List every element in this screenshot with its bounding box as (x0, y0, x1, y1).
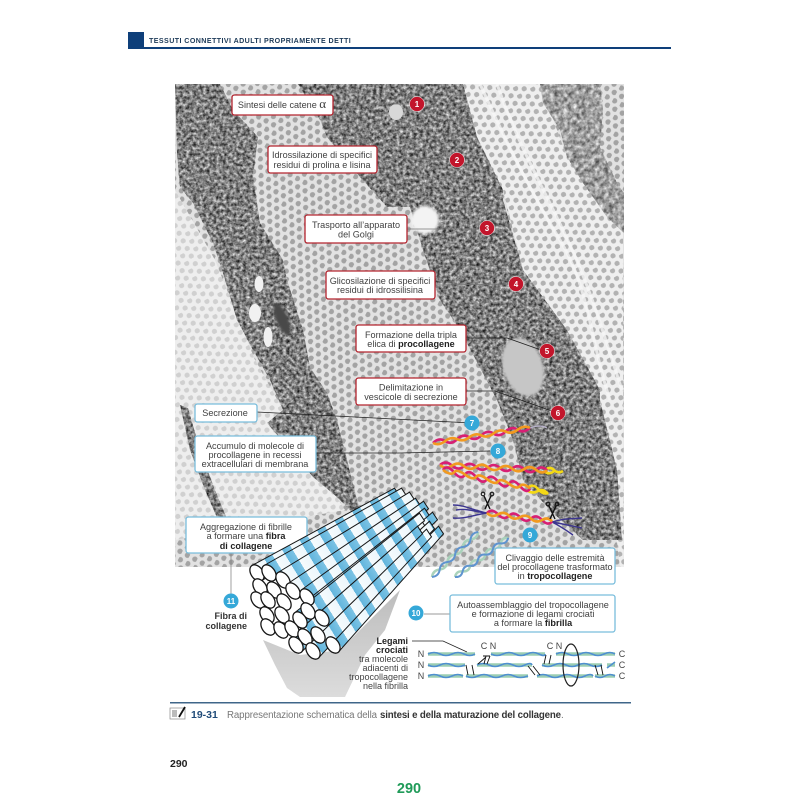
callout: aggregazione: a formare una fibra (207, 531, 286, 541)
page number green: 290 (397, 781, 421, 797)
cell: main fibroblast (298, 84, 622, 540)
end labels N: C (547, 641, 554, 651)
callout: trasporto (305, 215, 407, 243)
callout: vescicole: vescicole di secrezione (364, 392, 458, 402)
end labels N: C (619, 649, 626, 659)
callout: idrossilazione: residui di prolina e lisina (273, 160, 371, 170)
callout: vescicole (356, 378, 466, 405)
label: fibra di collagene: collagene (205, 621, 247, 631)
badge 6 (550, 406, 566, 420)
fibril end caps (247, 562, 343, 662)
caption rule (170, 702, 631, 704)
callout: autoassemblaggio: Autoassemblaggio del tropocollagene (457, 600, 609, 610)
row 2 (428, 662, 615, 668)
label: legami crociati: tropocollagene (349, 672, 408, 682)
caption: sintesi e della maturazione del collagene (380, 710, 562, 721)
badge 2 (450, 152, 464, 168)
badge 5 (540, 344, 554, 358)
badge 7 (464, 416, 480, 430)
callout: glicosilazione: Glicosilazione di specifici (330, 276, 430, 286)
label: legami crociati: crociati (376, 645, 408, 655)
badge 9 (522, 528, 538, 542)
callout: sintesi catene alfa: Sintesi delle catene α (238, 96, 326, 111)
callout: idrossilazione: Idrossilazione di specifici (272, 150, 372, 160)
callout: autoassemblaggio: e formazione di legami crociati (472, 609, 594, 619)
end labels N: N (418, 671, 424, 681)
badge 5: 5 (545, 347, 550, 356)
cell: left fibroblast (175, 84, 365, 525)
callout: autoassemblaggio: a formare la fibrilla (494, 618, 573, 628)
procollagen helix 3 (443, 467, 548, 494)
callout: accumulo (195, 436, 316, 472)
label: legami crociati: nella fibrilla (363, 681, 408, 691)
badge 11: 11 (227, 597, 236, 606)
badge 2: 2 (455, 156, 460, 165)
callout: aggregazione: di collagene (220, 541, 272, 551)
badge 6: 6 (556, 409, 561, 418)
callout: trasporto: del Golgi (338, 230, 374, 240)
badge 8: 8 (496, 447, 501, 456)
callout: clivaggio: del procollagene trasformato (497, 562, 613, 572)
badge 3 (480, 220, 494, 236)
caption: 19-31 (191, 709, 218, 721)
crosslinks (466, 655, 603, 675)
caption (191, 709, 564, 721)
callout: tripla elica: elica di procollagene (367, 339, 455, 349)
callout: aggregazione (186, 517, 307, 553)
vesicles (411, 206, 439, 234)
badge 1 (410, 96, 424, 112)
callout: secrezione (195, 404, 257, 422)
callout: vescicole: Delimitazione in (379, 382, 443, 392)
label: legami crociati: adiacenti di (362, 663, 408, 673)
label: fibra di collagene: Fibra di (214, 611, 247, 621)
end labels N: N (418, 649, 424, 659)
legami pointer line (412, 641, 467, 652)
callout: tripla elica: Formazione della tripla (365, 330, 458, 340)
callout: glicosilazione: residui di idrossilisina (337, 285, 424, 295)
label: legami crociati (349, 636, 408, 691)
row 3 (428, 674, 615, 678)
end labels N: C (481, 641, 488, 651)
callout: glicosilazione (326, 271, 435, 299)
tropocollagen left (432, 532, 478, 577)
end labels N: N (556, 641, 562, 651)
pale collagen field left (175, 190, 345, 540)
badge 11 (224, 594, 238, 608)
highlight ellipse (563, 644, 579, 686)
badge 1: 1 (415, 100, 420, 109)
row 1 (428, 652, 615, 656)
caption: Rappresentazione schematica della (227, 710, 378, 721)
procollagen helix with cleaved ends (453, 505, 582, 535)
numbered badges (224, 96, 566, 620)
callout: clivaggio: Clivaggio delle estremità (505, 553, 605, 563)
cell: thin process (180, 405, 226, 516)
page header (128, 32, 671, 49)
leader lines (231, 104, 552, 614)
badge 4 (508, 276, 524, 292)
badge 4: 4 (514, 280, 519, 289)
procollagen helix 2 (440, 463, 563, 473)
callout: secrezione: Secrezione (202, 408, 248, 418)
callout: clivaggio: in tropocollagene (518, 571, 592, 581)
folio: 290 (170, 758, 188, 770)
callout: accumulo: procollagene in recessi (208, 450, 302, 460)
fibril diagram (418, 641, 626, 686)
callout: aggregazione: Aggregazione di fibrille (200, 522, 292, 532)
pale fibres field right (463, 84, 624, 567)
callout: accumulo: extracellulari di membrana (202, 459, 309, 469)
fibre shadow (263, 590, 400, 697)
label: fibra di collagene (205, 611, 247, 631)
procollagen helix 1 (433, 426, 547, 444)
callout: clivaggio (495, 548, 615, 584)
badge 3: 3 (485, 224, 490, 233)
electron micrograph (175, 84, 624, 567)
callout: accumulo: Accumulo di molecole di (206, 441, 304, 451)
badge 9: 9 (528, 531, 533, 540)
callout: sintesi catene alfa (232, 95, 333, 115)
cell: upper right fibroblast (540, 84, 624, 233)
badge 8 (490, 444, 506, 458)
badge 10: 10 (412, 609, 421, 618)
end labels N (418, 641, 626, 681)
callout: autoassemblaggio (450, 595, 615, 632)
header title: TESSUTI CONNETTIVI ADULTI PROPRIAMENTE DETTI (149, 37, 351, 45)
end labels N: N (418, 660, 424, 670)
callout: tripla elica (356, 325, 466, 352)
label: legami crociati: tra molecole (359, 654, 408, 664)
badge 10 (408, 606, 424, 620)
end labels N: N (490, 641, 496, 651)
icon: scissors right (546, 502, 559, 519)
end labels N: C (619, 671, 626, 681)
tropocollagen right (455, 538, 508, 577)
end labels N: C (619, 660, 626, 670)
icon: note pen (170, 707, 185, 719)
icon: scissors left (481, 492, 494, 509)
callout: trasporto: Trasporto all’apparato (312, 220, 400, 230)
badge 7: 7 (470, 419, 475, 428)
label: legami crociati: Legami (376, 636, 408, 646)
collagen fibre bundle (247, 488, 444, 662)
caption: . (561, 710, 564, 721)
callout: idrossilazione (268, 146, 377, 173)
